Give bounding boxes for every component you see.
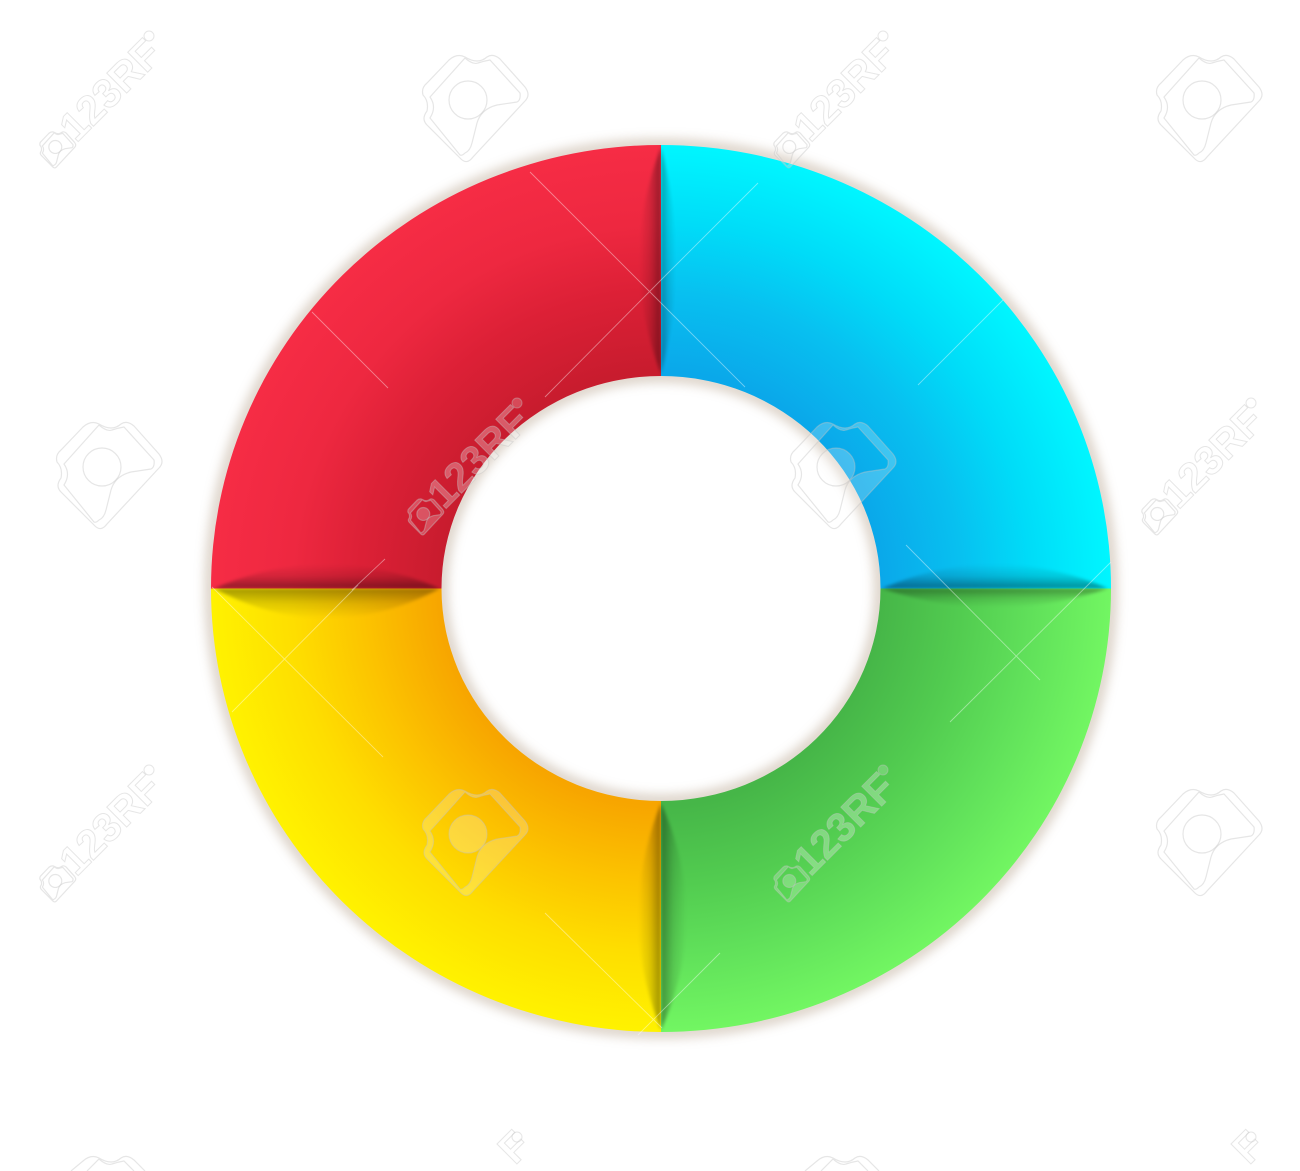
watermark: 123RF logos: 123RF — [784, 30, 904, 150]
segment: green bottom-right — [658, 585, 1116, 1037]
watermark: 123RF logos: 123RF — [1152, 397, 1272, 517]
watermark: 123RF logos: 123RF — [784, 764, 904, 884]
watermark: 123RF logos: 123RF — [50, 30, 170, 150]
watermark: 123RF logos: 123RF — [50, 764, 170, 884]
donut chart: four segments — [205, 140, 1116, 1037]
watermark: 123RF logos: 123RF — [418, 397, 538, 517]
watermark: 123RF logos: F — [489, 1122, 539, 1171]
watermark grid lines over ring — [212, 172, 1111, 1035]
segment: blue top-right — [658, 140, 1116, 592]
ring soft shadow — [211, 145, 1111, 1032]
watermark: 123RF logos: F — [1223, 1122, 1273, 1171]
segment: red top-left — [205, 140, 665, 592]
segment: yellow bottom-left — [205, 585, 665, 1037]
